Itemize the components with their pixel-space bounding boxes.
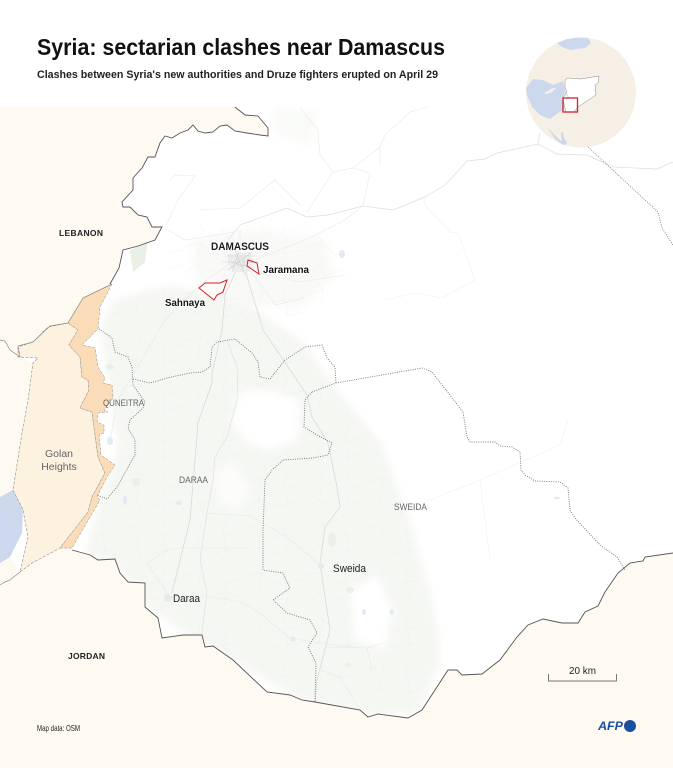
Daraa and Sweida urban areas	[164, 563, 324, 642]
title: Syria: sectarian clashes near Damascus	[37, 34, 445, 60]
label: Quneitra: QUNEITRA	[103, 398, 144, 408]
AFP logo: AFP	[597, 719, 624, 733]
AFP logo	[597, 719, 636, 733]
highlighted area: Jaramana	[247, 260, 259, 274]
label: Golan Heights: Golan	[45, 448, 73, 460]
subtitle: Clashes between Syria's new authorities and Druze fighters erupted on April 29	[37, 69, 438, 81]
Lake Tiberias	[0, 490, 23, 563]
label: Golan Heights: Heights	[41, 461, 77, 473]
Golan Heights area	[13, 323, 105, 572]
label: Sweida governorate: SWEIDA	[394, 502, 427, 512]
Cyprus	[544, 88, 556, 94]
title area	[0, 0, 500, 104]
Lebanon and Israel outline	[565, 92, 568, 99]
source note: Map data: OSM	[37, 723, 80, 733]
fine road mesh	[92, 285, 432, 712]
locator globe	[526, 38, 636, 148]
label: Jordan: JORDAN	[68, 651, 105, 661]
governorate boundaries	[97, 147, 673, 702]
Damascus urban area	[222, 248, 258, 275]
green patches	[106, 240, 354, 667]
neighbouring land: Israel and Jordan	[0, 340, 673, 768]
international borders	[0, 107, 673, 718]
Black Sea	[557, 38, 591, 50]
lakes and ponds	[107, 250, 560, 615]
label: Damascus: DAMASCUS	[211, 241, 269, 253]
label: Jaramana: Jaramana	[263, 264, 309, 276]
scale bar	[548, 665, 616, 681]
label: Daraa city: Daraa	[173, 593, 201, 605]
label: Sahnaya: Sahnaya	[165, 297, 205, 309]
neighbouring land: Lebanon	[0, 107, 268, 357]
Red Sea gulfs	[548, 128, 567, 145]
scale bar: 20 km	[569, 665, 596, 677]
roads	[110, 107, 673, 710]
Syria	[563, 76, 599, 112]
Mediterranean Sea	[526, 79, 565, 119]
highlighted area: Sahnaya	[199, 280, 227, 300]
map labels	[41, 228, 427, 661]
label: Sweida city: Sweida	[333, 563, 367, 575]
locator rectangle	[563, 98, 578, 112]
buffer zone strip	[60, 284, 115, 548]
land texture: populated southern Syria	[85, 108, 440, 716]
label: Daraa governorate: DARAA	[179, 475, 208, 485]
label: Lebanon: LEBANON	[59, 228, 103, 238]
